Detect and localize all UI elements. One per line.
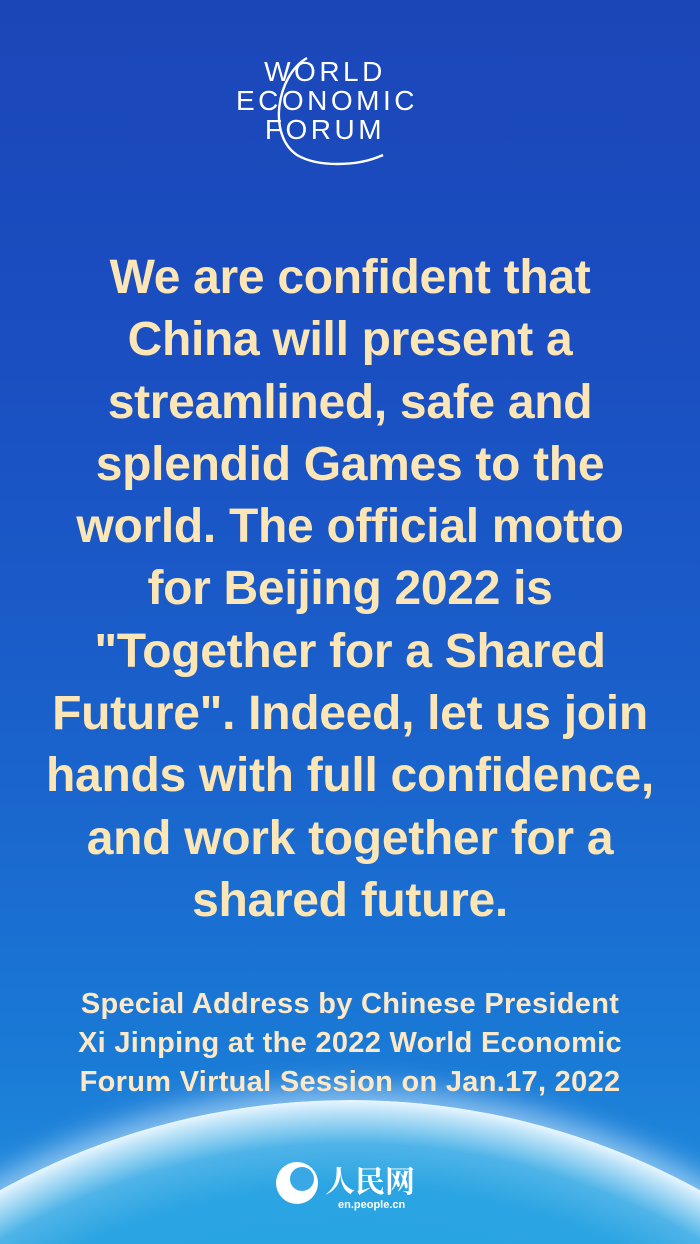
quote: shared future. [192,874,508,927]
quote: hands with full confidence, [46,749,654,802]
logo: people.cn: 人民网 [325,1157,415,1201]
logo: World Economic Forum [236,56,418,166]
logo: people.cn [276,1157,415,1211]
quote: Future". Indeed, let us join [52,687,648,740]
source attribution: Special Address by Chinese President [81,988,619,1020]
source attribution: Xi Jinping at the 2022 World Economic [78,1027,622,1059]
quote: for Beijing 2022 is [147,562,553,615]
quote [46,251,654,927]
quote: China will present a [128,313,572,366]
quote: "Together for a Shared [94,625,606,678]
quote: world. The official motto [76,500,624,553]
logo: World Economic Forum: FORUM [265,114,385,145]
quote: splendid Games to the [96,438,604,491]
logo: people.cn: en.people.cn [338,1199,406,1211]
source attribution: Forum Virtual Session on Jan.17, 2022 [80,1066,620,1098]
logo: World Economic Forum: ECONOMIC [236,85,418,116]
source attribution [78,988,622,1098]
quote: We are confident that [110,251,590,304]
quote: and work together for a [87,812,613,865]
logo: World Economic Forum: WORLD [264,56,386,87]
quote: streamlined, safe and [108,376,592,429]
globe [0,1069,700,1244]
